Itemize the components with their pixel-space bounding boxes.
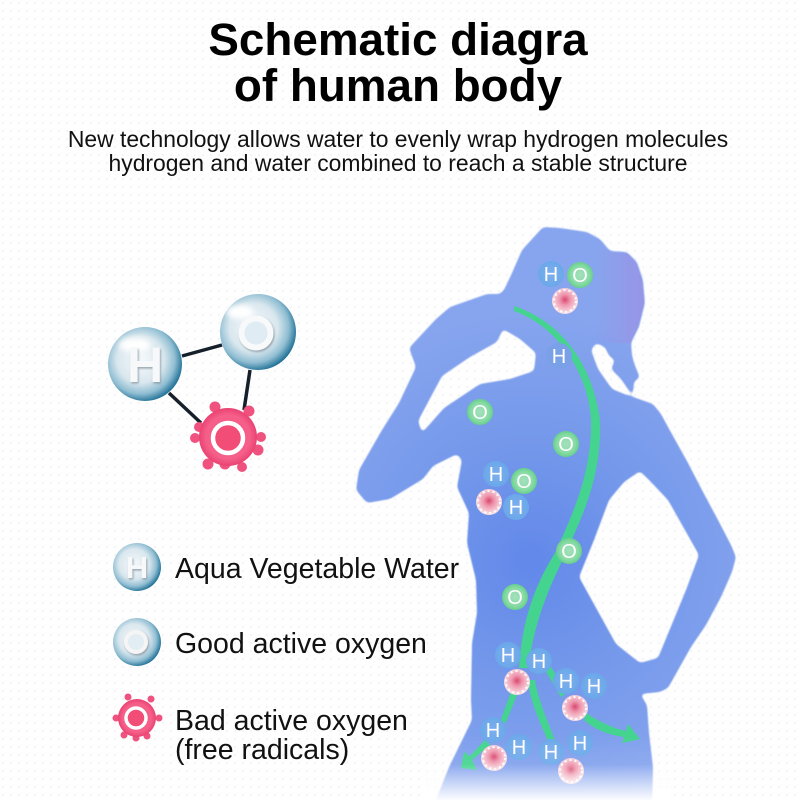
molecule: H low: H [486,720,500,742]
molecule: O chest 2 [511,468,537,494]
molecule: H hip 2: H [532,651,546,673]
molecule: H chest 2 [503,494,529,520]
molecule: O shoulder: O [472,402,488,424]
molecule: H low 3: H [544,742,558,764]
molecule: radical low 2 [558,758,584,784]
title [208,14,588,111]
legend [112,543,460,766]
molecule: H head: H [544,264,558,286]
large molecule diagram [108,294,296,472]
molecule: H hip 3: H [559,671,573,693]
legend: Aqua Vegetable Water: Aqua Vegetable Water [175,553,460,585]
molecule: H hip 4 [581,673,607,699]
subtitle text block [68,126,728,176]
molecule: O waist: O [561,541,577,563]
green flow arrows [461,306,640,770]
legend: Aqua Vegetable Water [113,543,460,591]
molecule: H neck [546,343,572,369]
molecule: H head [538,261,564,287]
title: of human body [234,60,563,111]
molecule: radical low [481,745,507,771]
molecule: H hip 3 [553,668,579,694]
legend: Good active oxygen: Good active oxygen [175,628,427,660]
body molecules [467,261,607,784]
molecule: O head [567,262,593,288]
atom: bad oxygen [190,402,266,472]
molecule: radical chest [476,489,502,515]
molecule: O shoulder [467,399,493,425]
molecule: radical hip [504,669,530,695]
title: Schematic diagra [208,14,588,65]
atom: H [108,327,182,401]
molecule: H low [480,717,506,743]
molecule: H low 2: H [512,737,526,759]
molecule: H hip 4: H [587,676,601,698]
legend: Bad active oxygen: Bad active oxygen [175,705,408,737]
legend: Bad active oxygen: (free radicals) [175,734,349,766]
molecule: H low 3 [538,739,564,765]
molecule: O head: O [572,265,588,287]
legend: Bad active oxygen [112,694,408,766]
molecule: O waist 2: O [507,587,523,609]
molecule: radical head [552,288,578,314]
human body silhouette with molecules [356,227,736,800]
molecule: H hip 2 [526,648,552,674]
molecule: H chest [483,461,509,487]
connecting bonds [169,345,250,423]
subtitle text block: New technology allows water to evenly wrap hydrogen molecules [68,126,728,152]
subtitle text block: hydrogen and water combined to reach a stable structure [109,150,687,176]
molecule: O waist [556,538,582,564]
molecule: H chest 2: H [509,497,523,519]
silhouette [356,227,736,800]
molecule: H chest: H [489,464,503,486]
molecule: H hip [495,642,521,668]
molecule: O chest [553,431,579,457]
molecule: H neck: H [552,346,566,368]
molecule: O waist 2 [502,584,528,610]
molecule: H low 4 [567,730,593,756]
atom: H: H [127,337,163,393]
legend: Good active oxygen [113,618,427,666]
legend: Aqua Vegetable Water: H [126,550,148,585]
molecule: H low 2 [506,734,532,760]
molecule: radical hip 2 [562,695,588,721]
molecule: H low 4: H [573,733,587,755]
bottom fade [420,735,670,800]
molecule: H hip: H [501,645,515,667]
atom: good oxygen [220,294,296,370]
molecule: O chest: O [558,434,574,456]
molecule: O chest 2: O [516,471,532,493]
hair tint [595,240,644,343]
